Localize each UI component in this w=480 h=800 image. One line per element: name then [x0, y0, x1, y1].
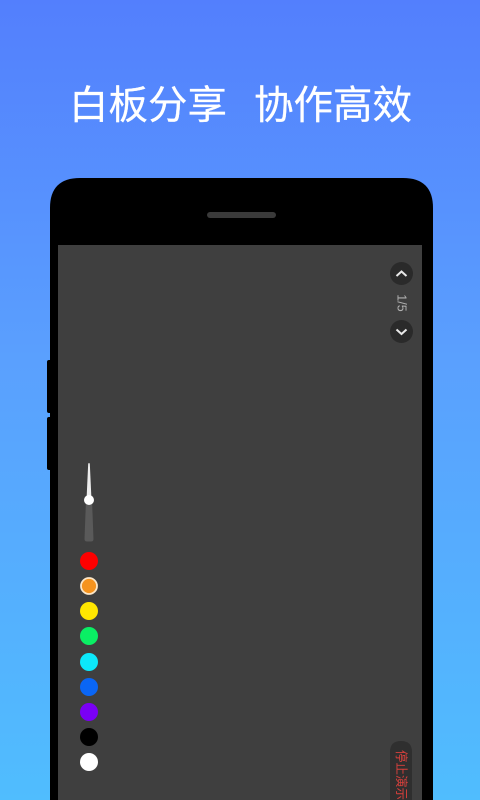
title: 协作高效 — [254, 84, 412, 128]
colour palette — [80, 552, 98, 771]
page up button — [390, 262, 413, 285]
phone body — [50, 178, 433, 800]
phone side buttons — [47, 360, 52, 470]
screen — [58, 245, 422, 800]
stop presentation button: 停止演示 — [394, 750, 409, 800]
speaker — [207, 212, 276, 218]
brush size slider — [84, 463, 94, 542]
title — [69, 84, 412, 128]
page indicator: 1/5 — [394, 294, 408, 312]
stop presentation button — [390, 741, 412, 800]
title: 白板分享 — [69, 84, 227, 128]
page down button — [390, 320, 413, 343]
